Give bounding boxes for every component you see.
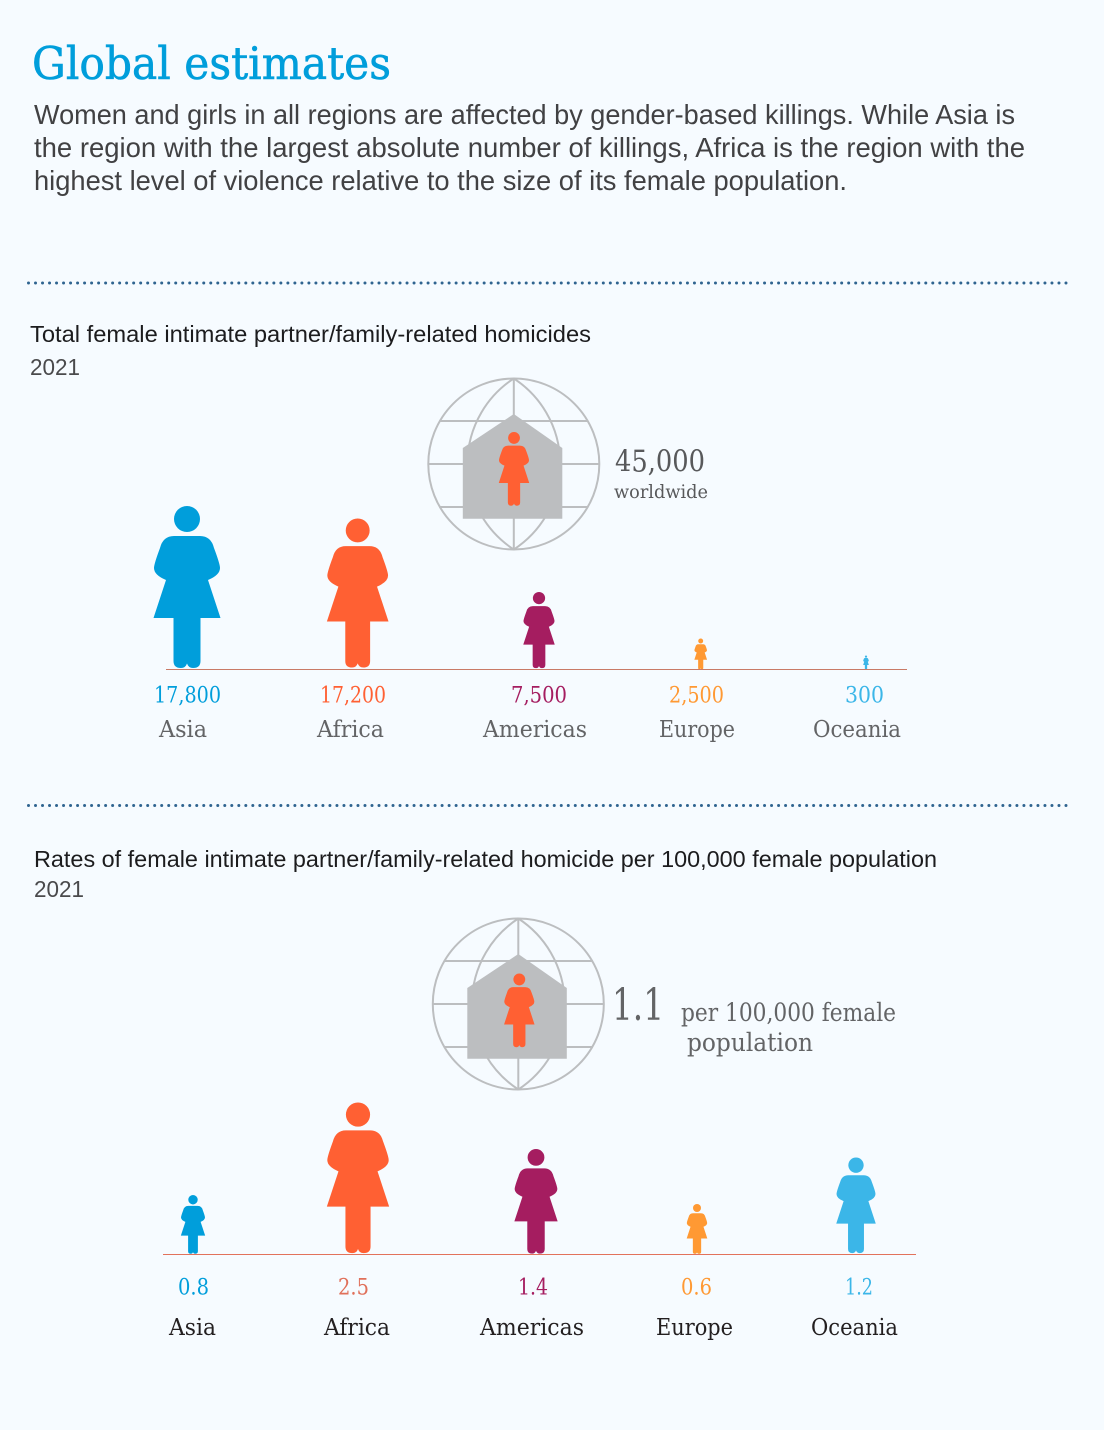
region labels: Asia xyxy=(168,1315,216,1341)
intro text: Women and girls in all regions are affected by gender-based killings. While Asia is xyxy=(34,99,1015,130)
values row xyxy=(178,1276,873,1300)
region labels: Asia xyxy=(158,717,207,743)
region labels: Europe xyxy=(659,717,735,743)
callout: 1.1 per 100,000 female population: per 100,000 female xyxy=(681,998,896,1027)
region labels xyxy=(158,717,901,743)
callout: 45,000 worldwide: 45,000 xyxy=(615,444,705,480)
icon: globe and house with woman xyxy=(428,378,599,550)
values row: 1.2 xyxy=(845,1276,873,1300)
values row: 2,500 xyxy=(669,684,724,708)
values row: 7,500 xyxy=(511,684,567,708)
title: Global estimates xyxy=(32,37,391,90)
chart: figures sized by rate xyxy=(163,1102,916,1254)
callout: 1.1 per 100,000 female population xyxy=(612,980,896,1057)
values row: 2.5 xyxy=(338,1276,369,1300)
heading: homicide rates: Rates of female intimate partner/family-related homicide per 100,000 female population xyxy=(34,846,937,872)
year: 2021 xyxy=(34,876,84,902)
region labels: Americas xyxy=(479,1315,584,1341)
region labels: Africa xyxy=(316,717,384,743)
icon: globe and house with woman xyxy=(433,918,604,1090)
values row: 17,800 xyxy=(154,684,221,708)
region labels: Africa xyxy=(323,1315,390,1341)
region labels: Europe xyxy=(656,1315,733,1341)
values row: 0.6 xyxy=(681,1276,712,1300)
panel: homicide rates xyxy=(34,846,937,1341)
values row: 0.8 xyxy=(178,1276,209,1300)
heading: total homicides: Total female intimate partner/family-related homicides xyxy=(30,321,591,347)
values row: 1.4 xyxy=(518,1276,548,1300)
intro text: the region with the largest absolute number of killings, Africa is the region with the xyxy=(34,132,1025,163)
panel: total homicides xyxy=(30,321,907,743)
chart: figures sized by total homicides xyxy=(154,506,907,670)
region labels xyxy=(168,1315,898,1341)
callout: 45,000 worldwide: worldwide xyxy=(614,481,708,503)
intro text: highest level of violence relative to the size of its female population. xyxy=(34,165,847,196)
region labels: Oceania xyxy=(813,717,901,743)
callout: 45,000 worldwide xyxy=(614,444,708,503)
region labels: Americas xyxy=(482,717,587,743)
year: 2021 xyxy=(30,354,80,380)
region labels: Oceania xyxy=(811,1315,898,1341)
values row: 17,200 xyxy=(320,684,386,708)
callout: 1.1 per 100,000 female population: 1.1 xyxy=(612,980,664,1031)
values row: 300 xyxy=(845,684,884,708)
callout: 1.1 per 100,000 female population: population xyxy=(687,1028,813,1057)
intro text xyxy=(34,99,1025,196)
values row xyxy=(154,684,884,708)
